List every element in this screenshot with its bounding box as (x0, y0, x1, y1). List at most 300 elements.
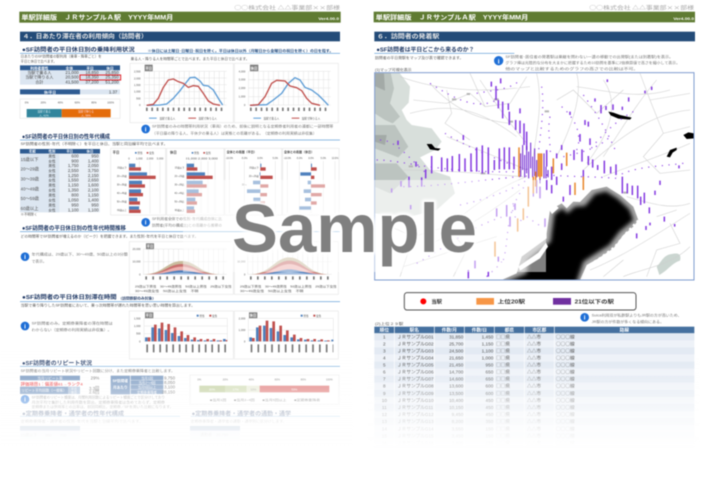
info note: commuter data: i (145, 126, 147, 133)
table: top origin stations: 150 (486, 426, 494, 431)
table: top origin stations: 2 (383, 341, 386, 346)
column chart: weekday stay: 平日 (146, 314, 152, 318)
line chart: holiday boarding: 0 (244, 103, 246, 107)
table: top origin stations: 10 (382, 398, 387, 403)
bar chart: weekday gender age: 50～59歳 (117, 199, 127, 203)
repeat rate table (20, 375, 99, 396)
watermark backing panel (183, 180, 546, 272)
map: lakes (427, 112, 694, 157)
table: top origin stations: 13,600 (449, 384, 464, 389)
table: top origin stations: □□県 (496, 348, 510, 354)
stacked bar: boarding vs alighting: 20% (41, 100, 47, 104)
heading: commuter breakdown: ●定期券乗降者・通学者の通勤・通学 (192, 409, 291, 417)
heading: commuter gender age: 15歳以下 950 700 (21, 432, 67, 438)
map: central purple cluster (521, 143, 548, 197)
company label: ○○株式会社 △△事業部××部様 (589, 4, 695, 12)
line chart: holiday boarding: 休日 (251, 65, 257, 70)
table: gender and age: 1,150 (68, 183, 79, 188)
info note: map reading: 他のマップと比較するためのグラフの高さでの比較は不可。 (505, 66, 638, 71)
report title bar (374, 12, 695, 22)
table: top origin stations: ○○○線 (556, 439, 575, 446)
column chart: weekday stay: 男性 (199, 314, 205, 318)
legend: top 20: 上位20駅 (498, 297, 526, 305)
bar chart: weekday deviation: -10.0% (226, 158, 233, 160)
table: top origin stations (374, 327, 694, 447)
table: top origin stations: ＪＲサンプルG10 (397, 398, 434, 404)
line chart: weekday boarding: 1,000 (134, 90, 141, 94)
column chart: holiday stay: 2,000 (239, 316, 246, 320)
table: gender and age: 1,750 (68, 163, 79, 168)
table: top origin stations: ＪＲサンプルG16 (397, 440, 434, 446)
area chart: weekday: 20,000 (133, 247, 141, 251)
repeat counts table: 当月1回 (141, 375, 154, 380)
table: top origin stations: □□県 (496, 391, 510, 397)
table: top origin stations: ＪＲサンプルG12 (397, 412, 434, 418)
stacked bar: repeat mix: 20% (223, 377, 229, 381)
table: top origin stations: ○○○線 (556, 404, 575, 411)
table: top origin stations: △△市 (527, 376, 541, 383)
table: top origin stations: □□県 (496, 419, 510, 425)
repeat counts table: 当月5回以上 (138, 385, 157, 390)
fade out bottom of left page (0, 350, 353, 447)
table: top origin stations: ○○○線 (556, 432, 575, 439)
column chart: weekday stay: 1,000 (134, 324, 141, 328)
ratio row: 休/平日 (44, 89, 56, 94)
stacked bar: boarding vs alighting: 0% (25, 100, 29, 104)
table: top origin stations: 7 (383, 377, 386, 382)
table: gender and age: 1,400 (88, 197, 99, 202)
table: top origin stations: 24,500 (449, 348, 464, 353)
stacked bar: boarding vs alighting: 人, 42% (39, 113, 49, 117)
report title bar: Ver4.00.0 (673, 17, 694, 21)
bar chart: holiday deviation (283, 148, 339, 215)
bar chart: weekday gender age: 15歳以下 (117, 166, 127, 170)
repeat counts table: 3,100 (164, 385, 176, 390)
line chart: holiday boarding: 3,000 (239, 78, 246, 82)
table: gender and age: 3,750 (88, 168, 99, 173)
table: gender and age: 1,350 (68, 188, 79, 193)
info note: gender age: SF利用者全体での性別･年代構成自体に比 (152, 216, 222, 221)
table: gender and age: 男性 (48, 202, 56, 207)
map: origin stations (375, 73, 694, 283)
table: top origin stations: △△市 (527, 369, 541, 376)
bar chart: holiday deviation: 5.0% (321, 158, 326, 160)
line chart: weekday boarding: 当駅で乗る人 (159, 116, 176, 120)
table: top origin stations: 1 (383, 334, 386, 339)
stacked bar: repeat mix: ■当月1回 ■当月2~4回 ■当月5回以上 ■定期券乗降者 (210, 397, 320, 402)
note: weekday definition: ※休日には土曜日･日曜日･祝日を除く。平日は休日以外（月曜日から金曜日の祝日を除く）の日を指す。 (148, 48, 333, 53)
repeat rate table: 評価項目1：偏差値61→ランク4 (21, 380, 84, 386)
line chart: holiday boarding: 当駅で乗る人 (263, 116, 280, 120)
table: boarding counts (20, 65, 121, 85)
section heading 4: ４．日あたり滞在者の利用傾向（訪問者） (23, 32, 148, 40)
table: top origin stations: ＪＲサンプルG03 (397, 348, 434, 354)
area chart: weekday: 10,000 (133, 260, 141, 264)
heading: stay duration (20, 293, 340, 302)
table: gender and age: 女性 (48, 197, 56, 202)
table: gender and age: 年齢 (29, 149, 36, 154)
column chart: holiday stay: 1,000 (239, 328, 246, 332)
report title bar: Ver4.00.0 (318, 17, 339, 21)
bar chart: weekday gender age: 0 (128, 157, 130, 161)
bar chart: weekday gender age: 40～49歳 (117, 191, 127, 195)
table: top origin stations: 16 (382, 440, 387, 445)
map: tokyo bay (502, 187, 646, 283)
bar chart: weekday gender age: 60歳以上 (117, 208, 127, 212)
stacked bar: boarding vs alighting: 人, 58% (81, 113, 91, 117)
table: gender and age: 1,400 (88, 158, 99, 163)
fade out bottom of right page (367, 337, 700, 447)
table: gender and age: 1,600 (88, 183, 99, 188)
table: gender and age: 2,550 (68, 168, 79, 173)
info note: age classes: で表示。 (32, 258, 47, 263)
bar chart: holiday gender age (167, 148, 224, 215)
column chart: weekday stay: 500 (136, 332, 141, 336)
ratio row (20, 89, 120, 94)
table: gender and age: 1,100 (68, 207, 79, 212)
report title bar: 単駅詳細版 ＪＲサンプルＡ駅 YYYY年MM月 (21, 13, 173, 22)
table: top origin stations: 9,450 (452, 412, 464, 417)
table: top origin stations: □□県 (496, 405, 510, 411)
stacked bar: boarding vs alighting: 当駅で降りる (78, 109, 94, 113)
bar chart: holiday deviation: 全体との乖離（休日） (284, 149, 314, 154)
table: top origin stations: 21,450 (449, 363, 464, 368)
table: gender and age: 女性 (48, 158, 56, 163)
stacked bar: boarding vs alighting: 40% (58, 100, 64, 104)
heading: commuter breakdown (190, 409, 340, 441)
table: gender and age: 1,250 (68, 173, 79, 178)
map legend (404, 293, 636, 310)
bar chart: holiday deviation: 10.0% (332, 158, 338, 160)
heading: commuter gender age: ●定期券乗降者・通学者の性年代構成 (22, 409, 124, 417)
chart caption: 乗る人・降りる人を時間帯ごとで比べます。また平日と休日で比べます。 (131, 56, 249, 61)
table: top origin stations: 21,650 (449, 356, 464, 361)
table: boarding counts: 合計 (35, 79, 43, 85)
heading: repeat status: ●SF訪問者のリピート状況 (22, 359, 92, 367)
bar chart: weekday gender age: 平日 (113, 151, 119, 155)
table: gender and age: 20～29歳 (21, 166, 40, 172)
column chart: holiday stay: 0 (244, 339, 246, 343)
table: top origin stations: □□県 (496, 412, 510, 418)
time trend caption: どの時間帯でSF訪問者が増えるのか（ピーク）を把握できます。また性別･年代を平日と休日で比べます。 (21, 233, 198, 238)
table: top origin stations: 路線 (620, 327, 629, 334)
table: top origin stations: 3,400 (452, 440, 464, 445)
table: top origin stations: ＪＲサンプルG15 (397, 433, 434, 439)
section heading 6 (374, 32, 695, 41)
bar chart: weekday gender age: 2,000 (147, 157, 154, 161)
column chart: weekday stay: 女性 (212, 314, 218, 318)
line chart: weekday boarding: 1,500 (134, 83, 141, 87)
stacked bar: repeat mix: 0% (197, 377, 202, 381)
line chart: weekday boarding: 当駅で降りる人 (198, 116, 217, 120)
repeat counts table: 8,050 (164, 380, 176, 385)
table: top origin stations: 31,850 (449, 334, 464, 339)
line chart: holiday boarding: 4,000 (239, 69, 246, 73)
heading: stay duration: （訪問鉄駅のみ対象） (118, 295, 156, 300)
heading: origin stations (374, 46, 514, 54)
info note: commuter data: SF訪問者のみの時間帯利用状況（車両）のため、前後に説明となる定期券者利用者の遷都に一部時間帯 (152, 123, 334, 128)
watermark: Sample: Sample (232, 190, 477, 267)
table: gender and age: 女性 (48, 207, 56, 212)
table: top origin stations: ○○○線 (556, 369, 575, 376)
table: top origin stations: ＪＲサンプルG04 (397, 356, 434, 362)
table: top origin stations: △△市 (527, 333, 541, 340)
bar chart: weekday gender age: 20～29歳 (117, 174, 127, 178)
info note: age classes: i (24, 254, 26, 261)
table: top origin stations: 14 (382, 426, 387, 431)
table: top origin stations: ○○○線 (556, 333, 575, 340)
repeat counts table: 定期券乗降者 (137, 389, 158, 394)
table: gender and age: 男性 (48, 153, 56, 158)
table: boarding counts: 25,350 (105, 75, 119, 80)
heading: origin stations: ●SF訪問者は平日どこから来るのか？ (376, 46, 474, 54)
column chart: holiday stay: 男性 (303, 314, 309, 318)
stacked bar: repeat mix: 10% (250, 387, 257, 391)
table: gender and age: 50～59歳 (21, 195, 40, 201)
table: top origin stations: ○○○線 (556, 347, 575, 354)
table: top origin stations: ○○○線 (556, 397, 575, 404)
table: top origin stations: △△市 (527, 418, 541, 425)
table: top origin stations: □□県 (496, 341, 510, 347)
table: gender and age: 1,550 (68, 178, 79, 183)
table: top origin stations: 順位 (380, 327, 389, 334)
table: top origin stations: 9 (383, 391, 386, 396)
table: top origin stations: ○○○線 (556, 355, 575, 362)
heading: stay duration: ●SF訪問者の平日休日別滞在時間 (22, 293, 117, 301)
area chart: holiday (234, 242, 338, 294)
report title bar (19, 12, 341, 23)
table: gender and age: 15歳以下 (21, 156, 39, 163)
table: gender and age: 女性 (48, 188, 56, 193)
info note: gender age: i (145, 220, 147, 227)
table: gender and age: 1,150 (88, 192, 99, 197)
repeat rate table: 29% (91, 375, 99, 380)
table: top origin stations: 都県 (505, 327, 514, 334)
repeat rate table: 当月リピート率 (37, 375, 63, 380)
table: top origin stations: 4 (383, 356, 386, 361)
table: top origin stations: ＪＲサンプルG13 (397, 419, 434, 425)
area chart: weekday: 30～49歳女性 50歳以上女性 不明 (135, 288, 198, 293)
table: boarding counts: 21,000 (65, 70, 79, 75)
table: top origin stations: △△市 (527, 355, 541, 362)
info note: table: Suica利用双が私鉄駅よりもJR駅の方が高いため、 (592, 312, 682, 317)
table: top origin stations: 13 (382, 419, 387, 424)
table: gender and age: 性別 (49, 149, 56, 154)
column chart: weekday stay: 0 (139, 339, 141, 343)
bar chart: weekday gender age: 女性 (149, 151, 155, 155)
bar chart: weekday deviation: 全体との乖離（平日） (227, 149, 257, 154)
info note: map reading: グラフ棒は光陰的な分布を大まかに把握するため10訪問を基準に2倍換算値で高さを縮小して表示。 (505, 60, 680, 65)
stacked bar: boarding vs alighting: 当駅で乗る (37, 109, 51, 113)
area chart: weekday (129, 242, 233, 294)
intro text (21, 53, 102, 64)
info note: map reading: i (498, 58, 500, 65)
table: gender and age: 1,050 (68, 197, 79, 202)
table: top origin stations: 3,450 (452, 433, 464, 438)
stacked bar: repeat mix (190, 375, 339, 404)
stay duration caption: 当駅で乗り降りしたSF訪問者において、乗っ次時間帯が遅れた時間帯を思い思い時間を算出します。 (21, 303, 195, 308)
stacked bar: repeat mix: 60% (275, 377, 281, 381)
table: top origin stations: ○○○線 (556, 340, 575, 347)
table label: (2)上位２９駅 (375, 321, 404, 326)
table: top origin stations: 350 (486, 419, 494, 424)
info note: table: i (584, 315, 586, 322)
table: top origin stations: 25,700 (449, 341, 464, 346)
table: boarding counts: 平日 (86, 66, 94, 70)
intro text: 日あたりのSF訪問者の駅利用（乗車・降車ごと）を (21, 53, 102, 58)
table: gender and age (20, 149, 100, 217)
legend: this station (420, 297, 443, 305)
bar chart: holiday gender age: 60歳以上 (175, 208, 185, 212)
table: top origin stations: 件数/月 (442, 327, 457, 334)
repeat caption: SF訪問者の当月リピート状況やリピート回数に分け、また定期券乗降者と比較します。 (21, 368, 175, 373)
table: gender and age: 2,050 (88, 163, 99, 168)
table: top origin stations: 市区郡 (532, 327, 547, 334)
table: top origin stations: □□県 (496, 398, 510, 404)
table: gender and age: 平日 (66, 150, 73, 154)
repeat rate table: 平日 (71, 387, 77, 391)
table: gender and age: 男性 (48, 163, 56, 168)
table: top origin stations: 650 (486, 370, 494, 375)
table: gender and age: 950 (91, 202, 99, 207)
line chart: weekday boarding: 平日 (145, 66, 152, 70)
bar chart: holiday gender age: 40～49歳 (174, 191, 185, 195)
stacked bar: repeat mix: 53% (291, 387, 298, 391)
bar chart: holiday gender age: 男性 (194, 151, 200, 155)
area chart: weekday: 0 (139, 272, 141, 276)
area chart: weekday: 平日 (147, 245, 153, 249)
map: mountains (375, 73, 680, 275)
repeat rate table: 2.6回 (89, 390, 99, 396)
origin caption: 訪問者の平日発駅をマップ及び表で確認できます。 (375, 55, 463, 60)
table: top origin stations: 600 (486, 384, 494, 389)
bar chart: weekday deviation: 0.0% (257, 158, 263, 160)
table: top origin stations: 10,150 (449, 405, 464, 410)
info note: repeat: 定期券または併用率との比率は、前回同期比、定期券／SFを用いた比較になります。 (32, 404, 173, 409)
map: station labels (409, 94, 628, 193)
table: top origin stations: ○○○線 (556, 425, 575, 432)
info note: map reading (494, 54, 680, 71)
table: top origin stations: □□県 (496, 433, 510, 439)
bar chart: weekday deviation: 15歳以下 (249, 166, 259, 170)
repeat rate table: 休日 (71, 389, 77, 394)
table: boarding counts: 41,500 (65, 80, 79, 85)
table: top origin stations: 12 (382, 412, 387, 417)
bar chart: weekday gender age (111, 148, 166, 215)
table: top origin stations: □□県 (496, 384, 510, 390)
info note: stay duration: SF訪問者のみ。定期券乗降者の滞在時間は (32, 321, 113, 326)
table: boarding counts: 利用者属性 (30, 65, 49, 70)
area chart: holiday: 10,000 (237, 260, 246, 264)
table: gender and age: 800 (71, 192, 79, 197)
intro text: 平日と休日で比べます。 (21, 59, 57, 64)
table: top origin stations: ○○○線 (556, 390, 575, 397)
table: gender and age: 男性 (48, 192, 56, 197)
bar chart: weekday deviation: 5.0% (273, 158, 278, 160)
table: boarding counts: 全体 (66, 65, 73, 70)
table: top origin stations: 1,150 (482, 341, 494, 346)
bar chart: weekday gender age: 3,000 (157, 157, 164, 161)
legend: this station: 当駅 (431, 297, 443, 305)
info note: age classes (21, 252, 128, 263)
table: gender and age: 950 (71, 202, 79, 207)
section heading 6: ６．訪問者の発着駅 (377, 32, 439, 40)
info note: gender age (141, 216, 222, 228)
table: top origin stations: 150 (486, 440, 494, 445)
line chart: holiday boarding: 2,000 (239, 86, 246, 90)
bar chart: holiday deviation: -10.0% (284, 158, 291, 160)
table: top origin stations: □□県 (496, 426, 510, 432)
table: top origin stations: 6 (383, 370, 386, 375)
table: top origin stations: △△市 (527, 340, 541, 347)
table: top origin stations: 件数/日 (472, 327, 487, 334)
table: top origin stations: 600 (486, 391, 494, 396)
table: top origin stations: □□県 (496, 363, 510, 369)
stacked bar: repeat mix: 17% (233, 387, 239, 391)
repeat rate table: 3.3回 (89, 386, 99, 392)
bar chart: holiday deviation: -5.0% (296, 158, 302, 160)
repeat counts table: SF訪問者 (113, 378, 128, 383)
heading: commuter breakdown: 定期券乗降者・通学者の通勤・通学別に区分けします。 (191, 419, 287, 424)
company label: ○○株式会社 △△事業部××部様 (234, 4, 341, 12)
heading: commuter gender age (20, 409, 180, 441)
stacked bar: repeat mix: 40% (249, 377, 255, 381)
stacked bar: repeat mix: 20% (209, 387, 215, 391)
heading: time trend: ●SF訪問者の平日休日別の性年代時間推移 (22, 224, 126, 232)
stacked bar: repeat mix: 100% (326, 377, 333, 381)
table: gender and age: 男性 (48, 173, 56, 178)
legend: 21st and below (553, 297, 615, 305)
table: top origin stations: 13,500 (449, 391, 464, 396)
table: top origin stations: 駅名 (410, 327, 419, 334)
bar chart: weekday gender age: 男性 (137, 151, 143, 155)
table: top origin stations: 14,600 (449, 377, 464, 382)
bar chart: holiday gender age: 女性 (206, 151, 211, 155)
area chart: holiday: 29歳以下男性 30～49歳男性 50歳以上男性 29歳以下女性 (240, 283, 337, 288)
line chart: weekday boarding: 2,000 (134, 76, 141, 80)
table: top origin stations: 650 (486, 377, 494, 382)
table: gender and age: 950 (91, 153, 99, 158)
stacked bar: repeat mix: 80% (301, 377, 307, 381)
page: station detail left (0, 4, 353, 447)
stacked bar: boarding vs alighting: 60% (75, 100, 81, 104)
map: orange bars (495, 147, 583, 257)
legend: top 20 (476, 297, 526, 305)
table: gender and age: 2,100 (88, 188, 99, 193)
bar chart: holiday gender age: 1,000 2,000 3,000 (188, 157, 218, 161)
column chart: weekday stay (129, 311, 233, 359)
bar chart: holiday gender age: 30～39歳 (174, 182, 185, 186)
table: top origin stations: ＪＲサンプルG09 (397, 391, 434, 397)
info note: repeat: i (24, 397, 26, 404)
info note: stay duration: i (24, 323, 26, 330)
bar chart: holiday gender age: 15歳以下 (175, 166, 185, 170)
table: top origin stations: 950 (486, 363, 494, 368)
table: top origin stations: △△市 (527, 404, 541, 411)
report title bar: 単駅詳細版 ＪＲサンプルＡ駅 YYYY年MM月 (376, 12, 528, 21)
table: gender and age: 1,100 (88, 207, 99, 212)
table: top origin stations: 1,450 (482, 334, 494, 339)
heading: commuter breakdown: 通勤者 20,750 (200, 431, 229, 437)
info note: map reading: SF訪問者･居住者の発着駅は乗継を問わない一連の移動での出発駅(または到着駅)を表示。 (505, 54, 673, 59)
table: boarding counts: 37,200 (85, 80, 99, 85)
line chart: holiday boarding: 1,000 (239, 95, 246, 99)
table: top origin stations: ＪＲサンプルG02 (397, 341, 434, 347)
legend: 21st and below: 21位以下の駅 (575, 297, 615, 305)
table: boarding counts: 20,500 (65, 75, 79, 80)
line chart: weekday boarding: 0 (139, 103, 141, 107)
area chart: holiday: 休日 (251, 244, 257, 249)
